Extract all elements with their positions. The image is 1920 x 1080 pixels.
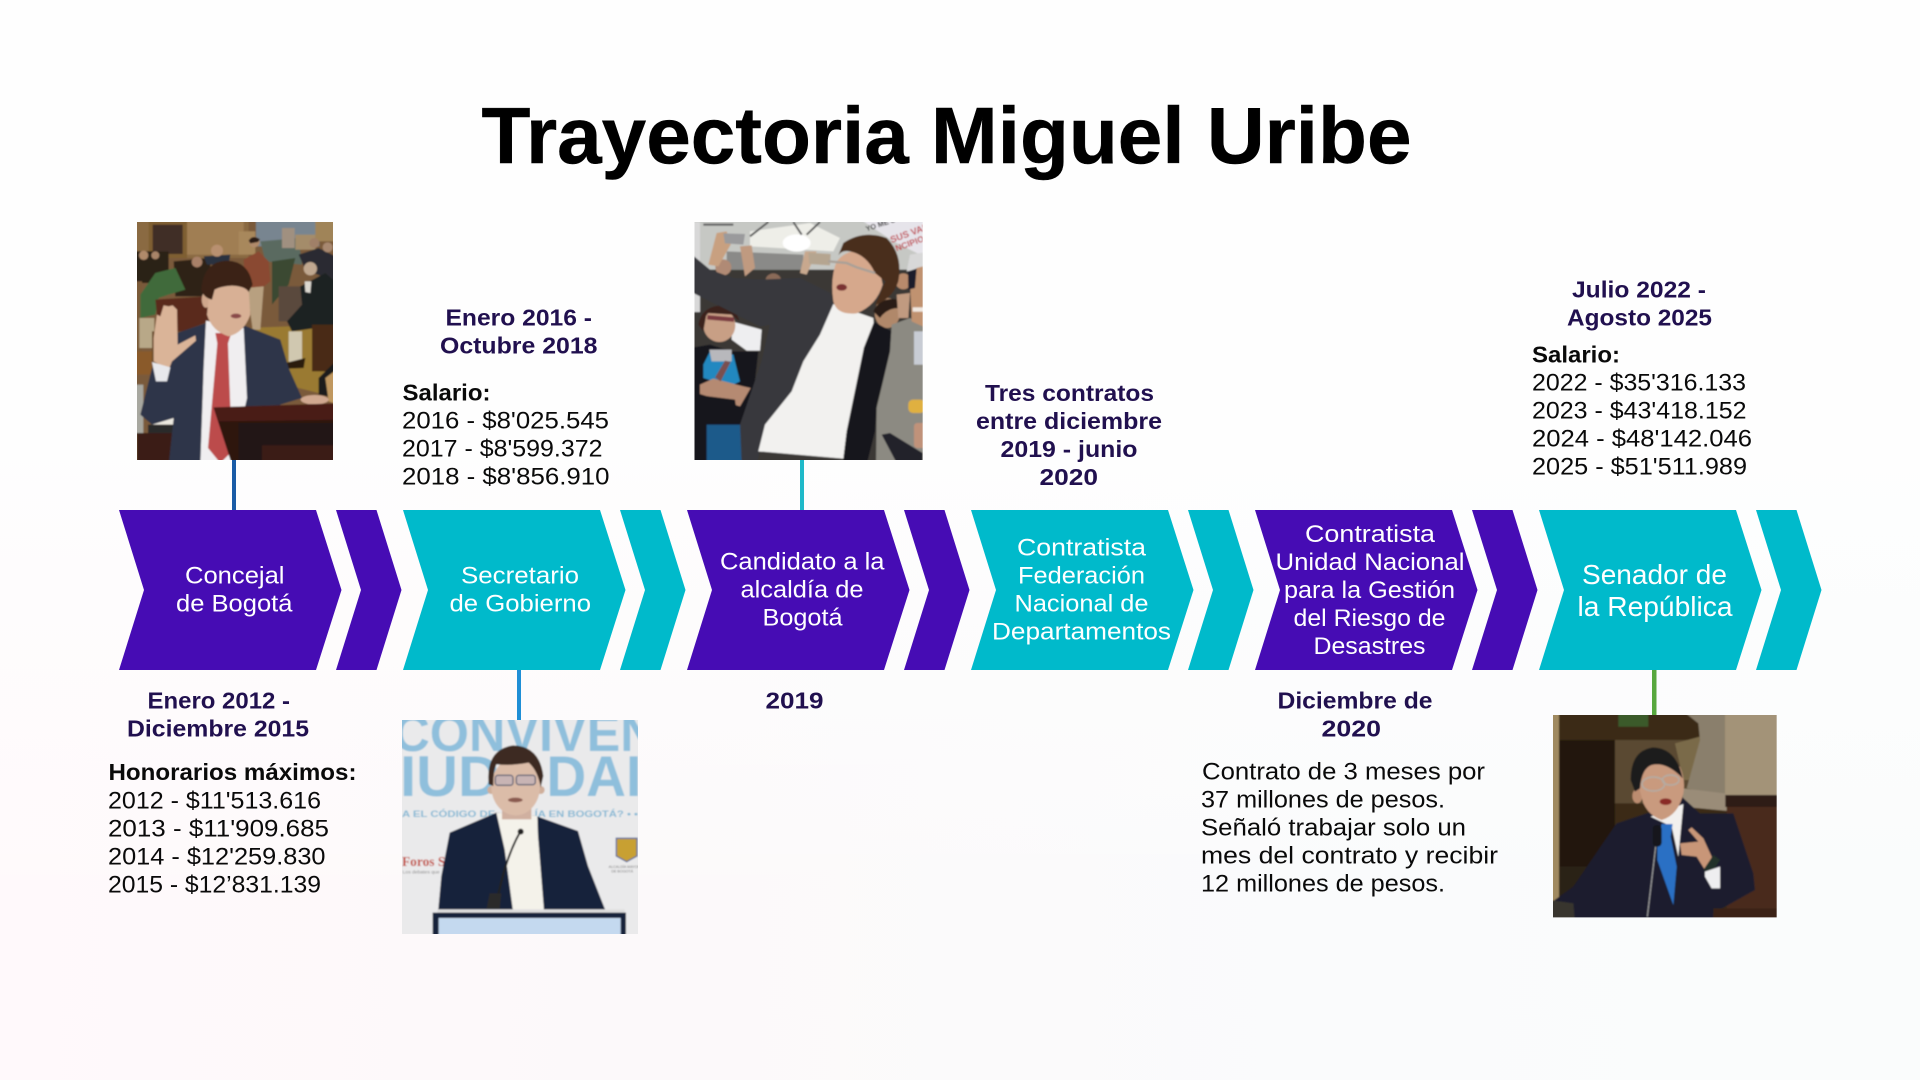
chevron label: Contratista Federación — [992, 534, 1171, 646]
connector: senador — [1652, 670, 1656, 715]
photo: Secretario at podium: Foros S — [402, 854, 445, 869]
chevron label: Contratista Unidad: Unidad Nacional — [1276, 549, 1464, 576]
chevron label: Secretario de Gobierno: Secretario — [461, 562, 579, 590]
fees list: 2012 - $11'513.616 — [108, 788, 321, 814]
date: 2019: 2019 — [766, 688, 824, 714]
chevron label: Concejal de Bogotá: de Bogotá — [176, 590, 293, 618]
chevron: contratista federación — [971, 510, 1254, 670]
chevron: contratista unidad — [1255, 510, 1538, 670]
dates: Tres contratos: 2019 - junio — [1000, 436, 1138, 462]
photo: Secretario at podium: ALCALDÍA MAYOR — [609, 865, 641, 869]
salary list: Salario: — [402, 380, 490, 406]
photo: Candidato with crowd — [689, 215, 930, 465]
photo: Secretario at podium: ÍA EN BOGOTÁ? • • — [535, 809, 638, 819]
salary list: 2025 - $51'511.989 — [1532, 454, 1747, 480]
connector: concejal — [232, 460, 236, 510]
salary list: 2018 - $8'856.910 — [402, 464, 610, 490]
chevron label: Contratista Unidad: para la Gestión — [1284, 577, 1455, 604]
chevron label: Senador — [1578, 559, 1733, 622]
chevron label: Concejal de Bogotá — [176, 562, 293, 618]
text block: Concejal dates and fees — [108, 688, 356, 898]
chevron label: Contratista Federación: Federación — [1018, 562, 1145, 590]
dates: Tres contratos — [976, 380, 1162, 490]
fees list: 2014 - $12'259.830 — [108, 844, 326, 870]
chevron label: Contratista Federación: Departamentos — [992, 618, 1171, 646]
fees list: 2013 - $11'909.685 — [108, 816, 329, 842]
chevron label: Contratista Unidad — [1276, 521, 1464, 660]
photo: Concejal taking oath — [132, 218, 339, 465]
chevron label: Senador: la República — [1578, 591, 1733, 622]
date: diciembre 2020: 2020 — [1322, 716, 1381, 742]
contract description: Contrato de 3 meses por — [1202, 758, 1485, 786]
contract description: 37 millones de pesos. — [1201, 786, 1445, 814]
photo: Secretario at podium: CONVIVEN — [393, 704, 657, 762]
chevron label: Contratista Federación: Contratista — [1017, 534, 1146, 562]
salary list: 2022 - $35'316.133 — [1532, 370, 1746, 396]
dates: 2022-2025: Agosto 2025 — [1567, 304, 1712, 330]
dates: 2016-2018: Octubre 2018 — [440, 332, 598, 358]
chevron label: Contratista Unidad: Contratista — [1305, 521, 1435, 548]
photo: Secretario at podium: A EL CÓDIGO DE — [402, 808, 495, 819]
fees list: Honorarios máximos: — [108, 759, 356, 785]
photo: Candidato with crowd: YO ME U — [865, 215, 897, 233]
dates: 2016-2018 — [440, 304, 598, 358]
fees list: 2015 - $12’831.139 — [108, 872, 321, 898]
dates: 2012-2015: Diciembre 2015 — [127, 716, 309, 742]
salary list: Salario: — [1532, 342, 1620, 368]
salary list — [402, 380, 610, 490]
salary list: 2023 - $43'418.152 — [1532, 398, 1746, 424]
contract description: 12 millones de pesos. — [1201, 870, 1445, 898]
text block: Diciembre de 2020 — [1201, 688, 1498, 898]
chevron label: Candidato: Bogotá — [762, 604, 843, 632]
chevron label: Senador: Senador de — [1582, 559, 1727, 590]
photo: Candidato with crowd: SUS VAL — [889, 222, 930, 245]
chevron label: Concejal de Bogotá: Concejal — [185, 562, 284, 590]
photo: Secretario at podium: Los debates que — [403, 870, 440, 876]
salary list: 2016 - $8'025.545 — [402, 408, 609, 434]
chevron: concejal — [119, 510, 402, 670]
chevron label: Secretario de Gobierno — [450, 562, 591, 618]
salary list: 2024 - $48'142.046 — [1532, 426, 1752, 452]
chevron: senador — [1539, 510, 1822, 670]
photo: Secretario at podium — [402, 720, 638, 934]
date: diciembre 2020 — [1278, 688, 1432, 742]
photo: Candidato with crowd: NCIPIO — [894, 234, 926, 253]
photo: Secretario at podium: DE BOGOTÁ — [611, 870, 634, 874]
chevron label: Contratista Unidad: Desastres — [1314, 633, 1426, 660]
dates: Tres contratos: entre diciembre — [976, 408, 1162, 434]
dates: 2022-2025 — [1567, 276, 1712, 330]
chevron: secretario — [403, 510, 686, 670]
dates: 2016-2018: Enero 2016 - — [446, 304, 592, 330]
text block: Senador dates and salary — [1532, 276, 1752, 480]
contract description: mes del contrato y recibir — [1201, 842, 1498, 870]
title: Trayectoria Miguel Uribe — [482, 91, 1412, 180]
contract description — [1201, 758, 1498, 898]
date: diciembre 2020: Diciembre de — [1278, 688, 1432, 714]
dates: Tres contratos: 2020 — [1040, 464, 1098, 490]
connector: secretario — [517, 670, 521, 720]
photo: Secretario at podium: IUD — [400, 745, 500, 809]
salary list: 2017 - $8'599.372 — [402, 436, 602, 462]
chevron label: Candidato — [720, 548, 885, 632]
timeline chevrons — [119, 510, 1822, 670]
chevron label: Secretario de Gobierno: de Gobierno — [450, 590, 591, 618]
chevron label: Candidato: alcaldía de — [740, 576, 864, 604]
dates: 2012-2015 — [127, 688, 309, 742]
photo: Senador speaking — [1553, 715, 1777, 918]
connector: candidato — [800, 460, 804, 510]
chevron: candidato — [687, 510, 970, 670]
dates: 2022-2025: Julio 2022 - — [1572, 276, 1706, 302]
dates: Tres contratos: Tres contratos — [985, 380, 1154, 406]
text block: Secretario dates and salary — [402, 304, 610, 490]
photo: Secretario at podium: DAI — [546, 745, 641, 809]
dates: 2012-2015: Enero 2012 - — [148, 688, 290, 714]
fees list — [108, 759, 356, 898]
chevron label: Contratista Federación: Nacional de — [1014, 590, 1148, 618]
chevron label: Contratista Unidad: del Riesgo de — [1294, 605, 1446, 632]
chevron label: Candidato: Candidato a la — [720, 548, 885, 576]
salary list — [1532, 342, 1752, 480]
contract description: Señaló trabajar solo un — [1201, 814, 1466, 842]
